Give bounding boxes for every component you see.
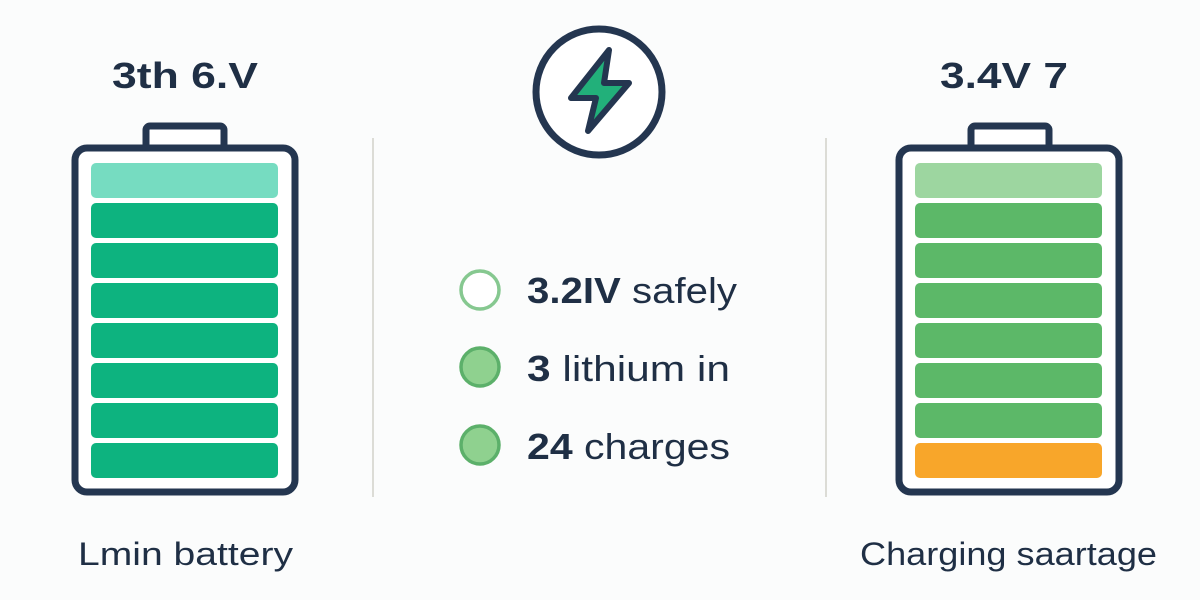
right heading: 3.4V 7 [940,55,1068,96]
list: 24 charges [527,426,730,467]
right battery [899,126,1119,492]
list: 3 lithium in [527,348,730,389]
right label: Charging saartage [860,536,1157,572]
left battery [75,126,295,492]
list: 3.2IV safely [527,270,737,311]
list [461,270,737,467]
left label: Lmin battery [78,536,293,572]
icon: lightning circle [536,29,662,155]
left heading: 3th 6.V [112,55,258,96]
